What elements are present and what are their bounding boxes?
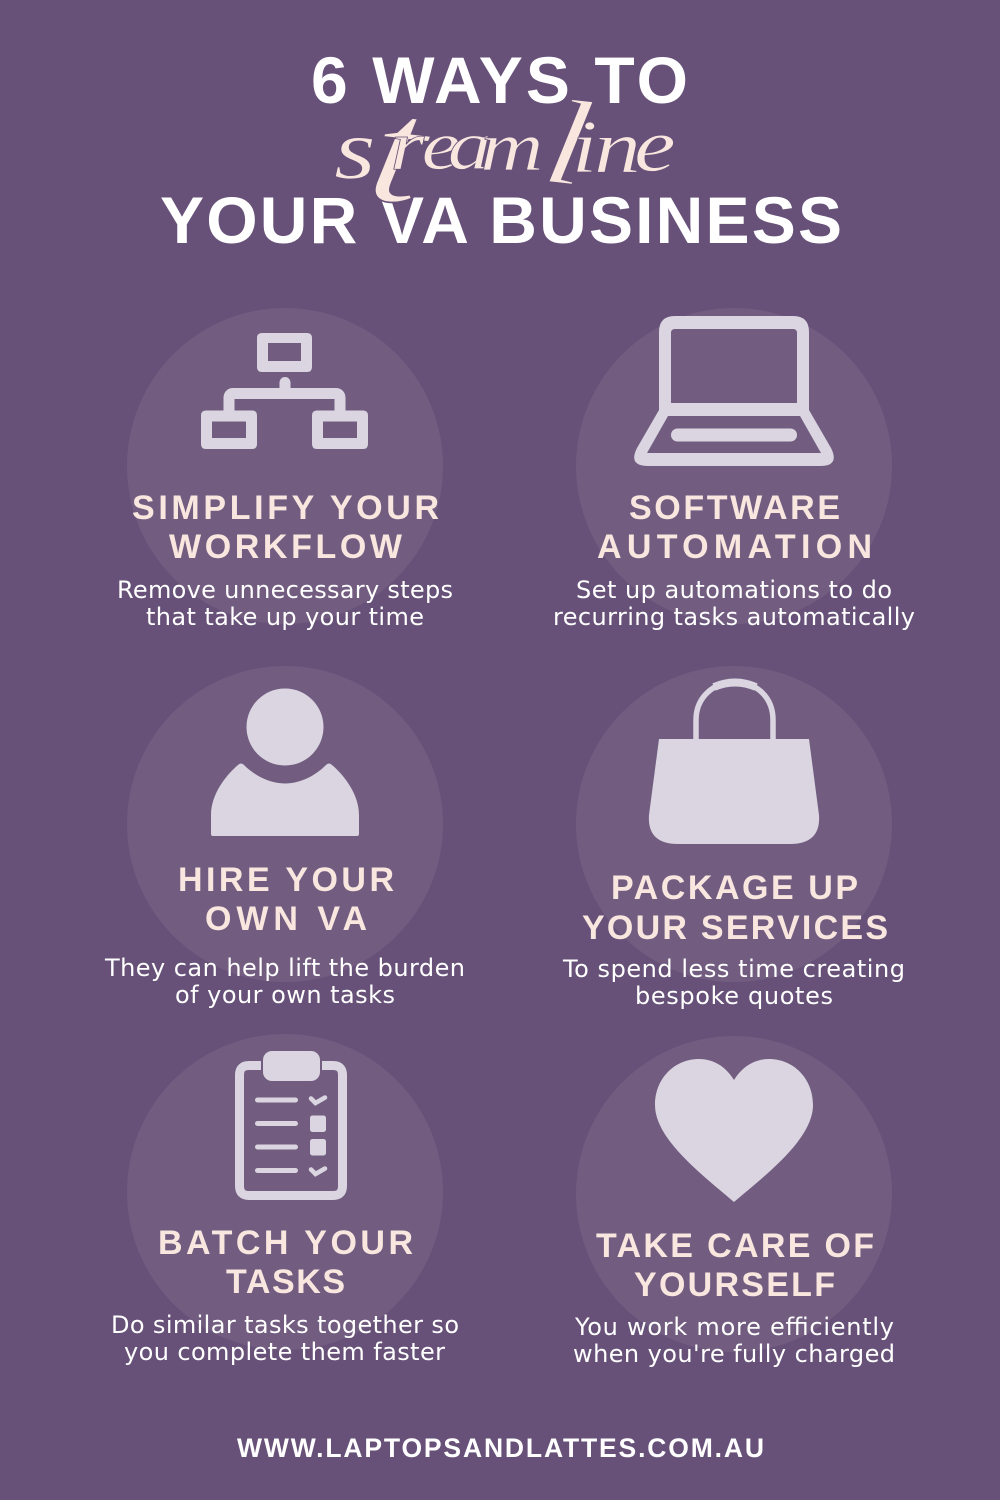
title: 6 WAYS TO <box>311 43 688 117</box>
heading <box>597 489 872 566</box>
panel: simplify your workflow <box>117 308 453 631</box>
description <box>111 1311 459 1366</box>
icon: laptop <box>634 316 834 466</box>
heading: SOFTWARE <box>629 489 840 527</box>
heading <box>158 1224 413 1301</box>
description <box>562 955 905 1010</box>
description: when you're fully charged <box>573 1340 895 1368</box>
title: i <box>572 106 598 189</box>
description <box>104 954 465 1009</box>
title: s <box>334 102 376 197</box>
icon: clipboard checklist <box>240 1051 342 1196</box>
description <box>573 1313 895 1368</box>
heading: TASKS <box>226 1263 345 1301</box>
description: To spend less time creating <box>562 955 905 983</box>
description: They can help lift the burden <box>104 954 465 982</box>
description <box>117 576 453 631</box>
title: a <box>448 107 491 185</box>
description: Set up automations to do <box>576 576 892 604</box>
title: t <box>358 66 443 237</box>
heading: TAKE CARE OF <box>596 1227 874 1265</box>
description: that take up your time <box>146 603 424 631</box>
description: Remove unnecessary steps <box>117 576 453 604</box>
title: YOUR VA BUSINESS <box>160 183 842 257</box>
icon: workflow <box>201 333 368 449</box>
icon: heart <box>655 1059 813 1202</box>
description: bespoke quotes <box>635 982 833 1010</box>
panel: software automation <box>553 308 915 631</box>
title: e <box>634 105 676 188</box>
heading: YOUR SERVICES <box>582 909 888 947</box>
description: Do similar tasks together so <box>111 1311 459 1339</box>
icon: handbag <box>649 682 819 844</box>
heading: AUTOMATION <box>597 528 872 566</box>
panel: hire your own va <box>104 666 465 1009</box>
heading: PACKAGE UP <box>611 869 858 907</box>
heading <box>596 1227 874 1304</box>
heading: SIMPLIFY YOUR <box>132 489 439 527</box>
title: m <box>480 108 543 186</box>
footer website: WWW.LAPTOPSANDLATTES.COM.AU <box>237 1433 764 1463</box>
title <box>160 43 842 257</box>
heading: HIRE YOUR <box>178 861 394 899</box>
icon: person <box>211 688 359 836</box>
description: you complete them faster <box>124 1338 445 1366</box>
title: n <box>594 106 641 189</box>
description: You work more efficiently <box>574 1313 894 1341</box>
heading <box>582 869 888 947</box>
panel: take care of yourself <box>573 1036 895 1368</box>
title: e <box>422 107 460 185</box>
description: recurring tasks automatically <box>553 603 915 631</box>
panel: batch your tasks <box>111 1034 459 1366</box>
heading: OWN VA <box>205 900 367 938</box>
heading <box>178 861 394 938</box>
heading: YOURSELF <box>634 1266 835 1304</box>
description: of your own tasks <box>175 981 395 1009</box>
title: l <box>536 73 601 212</box>
description <box>553 576 915 631</box>
title: r <box>390 107 426 185</box>
heading: WORKFLOW <box>169 528 403 566</box>
heading: BATCH YOUR <box>158 1224 413 1262</box>
panel: package up your services <box>562 666 905 1010</box>
heading <box>132 489 439 566</box>
